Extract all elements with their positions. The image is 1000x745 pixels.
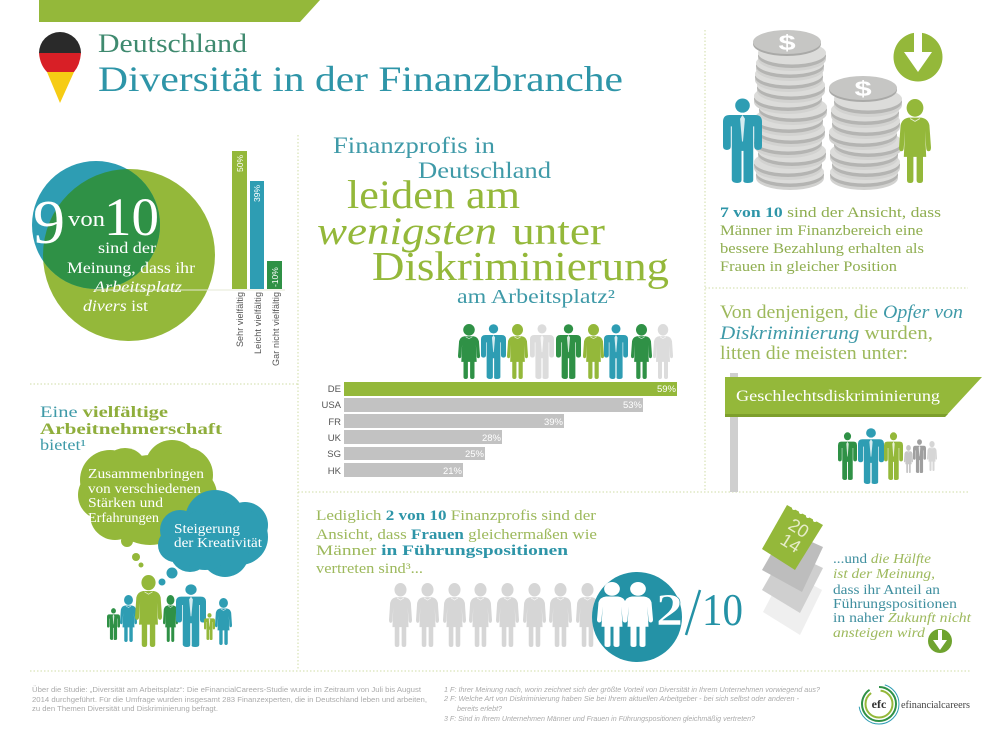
icon: German flag pin bbox=[39, 32, 81, 103]
heading: discrimination: Diskriminierung bbox=[372, 243, 669, 289]
statistic text: Meinung, dass ihr bbox=[67, 260, 196, 277]
heading: discrimination: leiden am bbox=[347, 172, 520, 217]
statistic text: von bbox=[68, 206, 105, 231]
icon: calendar pages: 20 bbox=[785, 514, 812, 542]
text: Diskriminierung wurden, bbox=[719, 324, 933, 344]
icon: coin stacks: $ bbox=[854, 77, 872, 101]
text: vertreten sind³... bbox=[316, 561, 423, 577]
people group bbox=[838, 428, 937, 484]
statistic text: divers ist bbox=[83, 298, 149, 315]
text: Führungspositionen bbox=[833, 596, 957, 611]
icon: coin stacks: $ bbox=[778, 31, 796, 55]
bar chart: countries: DE bbox=[328, 384, 341, 395]
family figures bbox=[107, 575, 232, 647]
bar chart: countries: 39% bbox=[544, 417, 564, 428]
bar chart: workplace diversity: Sehr vielfältig bbox=[235, 292, 245, 347]
pay gap text: 7 von 10 sind der Ansicht, dass bbox=[720, 205, 941, 221]
bar chart: countries: FR bbox=[328, 417, 341, 428]
footer: survey questions bbox=[443, 685, 821, 723]
bar chart: countries bbox=[321, 382, 677, 477]
text: Ansicht, dass Frauen gleichermaßen wie bbox=[316, 527, 597, 543]
statistic text bbox=[33, 187, 196, 315]
bar chart: workplace diversity: 50% bbox=[235, 155, 245, 172]
top banner bbox=[39, 0, 320, 22]
heading: discrimination: Finanzprofis in bbox=[333, 133, 496, 158]
pay gap text: bessere Bezahlung erhalten als bbox=[720, 241, 924, 257]
logo: efinancialcareers bbox=[859, 684, 970, 724]
title bbox=[98, 29, 623, 99]
text: ist der Meinung, bbox=[833, 566, 935, 581]
logo: efinancialcareers: efc bbox=[872, 697, 887, 711]
heading: discrimination: wenigsten bbox=[317, 210, 497, 253]
bar chart: countries: USA bbox=[321, 400, 342, 411]
heading: discrimination bbox=[317, 133, 669, 308]
heading: Eine vielfältige bbox=[40, 404, 168, 421]
statistic text: sind der bbox=[98, 240, 157, 257]
text bbox=[833, 551, 972, 640]
bar chart: countries: 53% bbox=[623, 400, 643, 411]
heading: Arbeitnehmerschaft bbox=[40, 421, 223, 438]
statistic text: Arbeitsplatz bbox=[93, 279, 182, 296]
bar chart: workplace diversity: Leicht vielfältig bbox=[253, 292, 263, 354]
text: ansteigen wird bbox=[833, 625, 925, 640]
statistic text: 10 bbox=[104, 187, 159, 247]
footer: survey questions: 3 F: Sind in Ihrem Unternehmen Männer und Frauen in Führungspositionen gleichmäßig vertreten? bbox=[444, 714, 756, 723]
panel: pay gap bbox=[720, 30, 942, 275]
gray women row bbox=[389, 583, 599, 647]
bar chart: countries: HK bbox=[328, 466, 342, 477]
statistic text: 9 bbox=[33, 189, 65, 257]
bar chart: workplace diversity bbox=[94, 151, 285, 366]
panel: women in leadership bbox=[316, 508, 743, 662]
text: Männer in Führungspositionen bbox=[316, 543, 568, 559]
teal circle with women bbox=[592, 572, 682, 662]
text: Lediglich 2 von 10 Finanzprofis sind der bbox=[316, 508, 596, 524]
bar chart: countries: UK bbox=[328, 433, 342, 444]
signpost: Geschlechtsdiskriminierung bbox=[736, 388, 940, 405]
text: ...und die Hälfte bbox=[833, 551, 931, 566]
panel: 9 von 10 bbox=[32, 161, 215, 341]
2/10 number bbox=[656, 584, 743, 635]
footer: about the study: 2014 durchgeführt. Für die Umfrage wurden insgesamt 283 Finanzexperten, die in Deutschland leben und arbeiten, bbox=[32, 695, 427, 704]
text bbox=[316, 508, 597, 577]
people row bbox=[458, 324, 673, 379]
icon: man bbox=[723, 98, 762, 183]
thought cloud: green: Erfahrungen bbox=[88, 511, 159, 526]
thought cloud: teal: der Kreativität bbox=[174, 536, 262, 551]
heading: discrimination: unter bbox=[512, 210, 605, 253]
text: litten die meisten unter: bbox=[720, 344, 908, 364]
signpost bbox=[725, 373, 982, 492]
venn circles bbox=[32, 161, 215, 341]
heading: discrimination: am Arbeitsplatz² bbox=[457, 287, 615, 308]
heading: bietet¹ bbox=[40, 437, 86, 454]
bar chart: countries: 28% bbox=[482, 433, 502, 444]
pay gap text bbox=[720, 205, 941, 275]
bar chart: countries: 25% bbox=[465, 449, 485, 460]
panel: victims of discrimination bbox=[719, 303, 982, 492]
thought cloud: teal: Steigerung bbox=[174, 522, 240, 537]
text: in naher Zukunft nicht bbox=[833, 610, 972, 625]
panel: diverse workforce bbox=[40, 404, 268, 647]
title: Diversität in der Finanzbranche bbox=[98, 59, 623, 99]
heading bbox=[40, 404, 223, 454]
footer: survey questions: 1 F: Ihrer Meinung nach, worin zeichnet sich der größte Vorteil von Diversität in Ihrem Unternehmen vorwiegend aus? bbox=[444, 685, 821, 694]
panel: half expect no increase bbox=[833, 551, 972, 653]
pay gap text: Frauen in gleicher Position bbox=[720, 259, 898, 275]
icon: down arrow bbox=[894, 30, 942, 82]
thought cloud: green: Stärken und bbox=[88, 496, 163, 511]
2/10 number: 2 bbox=[656, 584, 683, 635]
text: Von denjenigen, die Opfer von bbox=[720, 303, 963, 323]
thought cloud: green: von verschiedenen bbox=[88, 482, 201, 497]
bar chart: countries: 21% bbox=[443, 466, 463, 477]
icon: coin stacks bbox=[753, 30, 902, 190]
bar chart: countries: 59% bbox=[657, 384, 677, 395]
thought cloud: green: Zusammenbringen bbox=[88, 467, 204, 482]
bar chart: workplace diversity: -10% bbox=[270, 267, 280, 287]
text: dass ihr Anteil an bbox=[833, 582, 940, 597]
thought cloud: green bbox=[78, 440, 217, 568]
footer: about the study bbox=[32, 685, 427, 713]
icon: woman bbox=[899, 99, 931, 183]
bar chart: workplace diversity: Gar nicht vielfältig bbox=[271, 292, 281, 366]
bar chart: countries: SG bbox=[327, 449, 341, 460]
logo: efinancialcareers: efinancialcareers bbox=[901, 700, 970, 711]
icon: small down arrow bbox=[928, 629, 952, 653]
icon: calendar pages bbox=[762, 505, 823, 635]
footer: survey questions: 2 F: Welche Art von Diskriminierung haben Sie bei Ihrem aktuellen Arbeitgeber - bei sich selbst oder anderen - bbox=[443, 694, 799, 703]
footer: about the study: Über die Studie: „Diversität am Arbeitsplatz“: Die eFinancialCareers-Studie wurde im Zeitraum von Juli bis August bbox=[32, 685, 422, 694]
footer: about the study: zu den Themen Diversität und Diskriminierung befragt. bbox=[32, 704, 218, 713]
2/10 number: 10 bbox=[702, 584, 743, 635]
icon: calendar pages: 14 bbox=[777, 529, 804, 557]
title: Deutschland bbox=[98, 29, 247, 58]
text bbox=[719, 303, 963, 364]
heading: discrimination: Deutschland bbox=[418, 158, 552, 183]
pay gap text: Männer im Finanzbereich eine bbox=[720, 223, 923, 239]
footer: survey questions: bereits erlebt? bbox=[457, 704, 503, 713]
thought cloud: teal bbox=[158, 490, 268, 586]
bar chart: workplace diversity: 39% bbox=[252, 185, 262, 202]
